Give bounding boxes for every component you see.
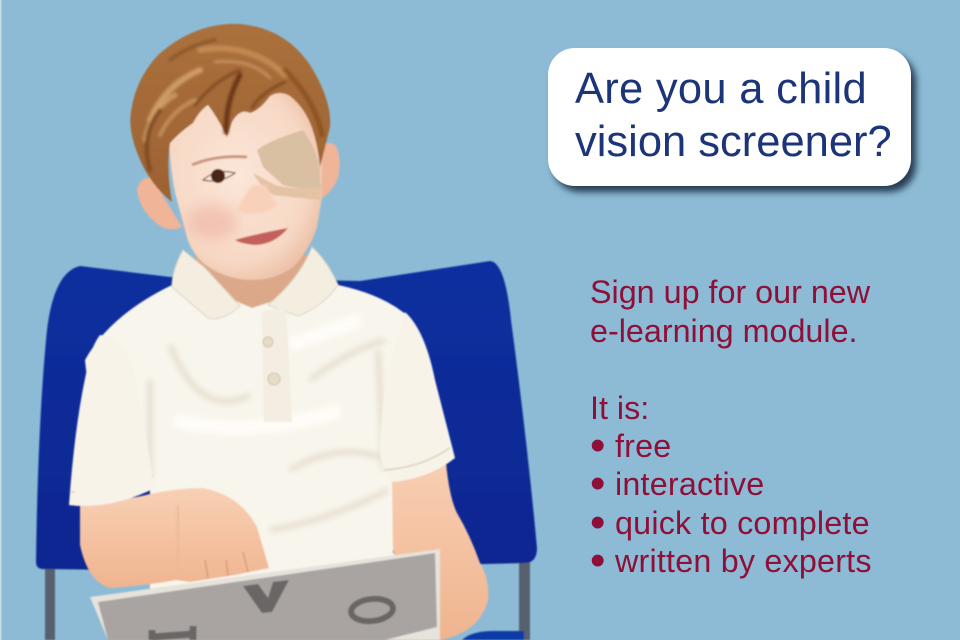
- bullet: written by experts: written by experts: [615, 543, 872, 579]
- heading line 1: Are you a child: [575, 65, 867, 113]
- eye: [192, 157, 247, 183]
- hair: [130, 24, 330, 202]
- right ear: [320, 143, 340, 198]
- sleeve hems over arm: [69, 470, 155, 506]
- shirt torso: [85, 285, 440, 600]
- eye patch: [253, 130, 322, 200]
- sign up line 2: e-learning module.: [590, 313, 858, 349]
- right sleeve: [380, 312, 455, 482]
- bullet: free: •: [590, 421, 605, 470]
- bullet: quick to complete: •: [590, 498, 605, 547]
- hair strands: [145, 40, 322, 170]
- collar: [172, 247, 338, 319]
- chair legs: [45, 560, 530, 640]
- right arm (viewer's right): [383, 450, 488, 640]
- heading line 2: vision screener?: [575, 118, 892, 166]
- card edge: [90, 549, 440, 640]
- card face: [98, 553, 437, 640]
- bullet: written by experts: [590, 536, 872, 585]
- bullet: interactive: •: [590, 459, 605, 508]
- boy: [69, 24, 488, 640]
- shirt highlights and folds: [150, 320, 388, 530]
- face: [168, 90, 322, 280]
- bullet: interactive: interactive: [615, 466, 764, 502]
- text block: sign-up information: [590, 274, 872, 585]
- bullet: quick to complete: [590, 498, 870, 547]
- wrist crease: [176, 505, 179, 575]
- chair: [36, 261, 537, 640]
- placket and buttons: [262, 306, 292, 422]
- card letters: [152, 580, 394, 640]
- left edge highlight: [0, 0, 2, 640]
- left ear: [137, 178, 182, 229]
- bullet: free: free: [615, 428, 671, 464]
- mouth: [235, 228, 288, 245]
- sign up line 1: Sign up for our new: [590, 274, 870, 310]
- neck: [195, 250, 310, 308]
- chair back: [36, 261, 537, 570]
- bullet: written by experts: •: [590, 536, 605, 585]
- bullet: quick to complete: quick to complete: [615, 505, 870, 541]
- callout: heading bubble: [548, 48, 911, 186]
- left arm: [80, 488, 269, 588]
- cheek blush: [186, 204, 238, 240]
- left sleeve: [69, 335, 155, 506]
- letter card: [90, 549, 440, 640]
- bullet: interactive: [590, 459, 764, 508]
- list intro: It is:: [590, 390, 649, 426]
- bullet: free: [590, 421, 671, 470]
- nose: [238, 185, 277, 214]
